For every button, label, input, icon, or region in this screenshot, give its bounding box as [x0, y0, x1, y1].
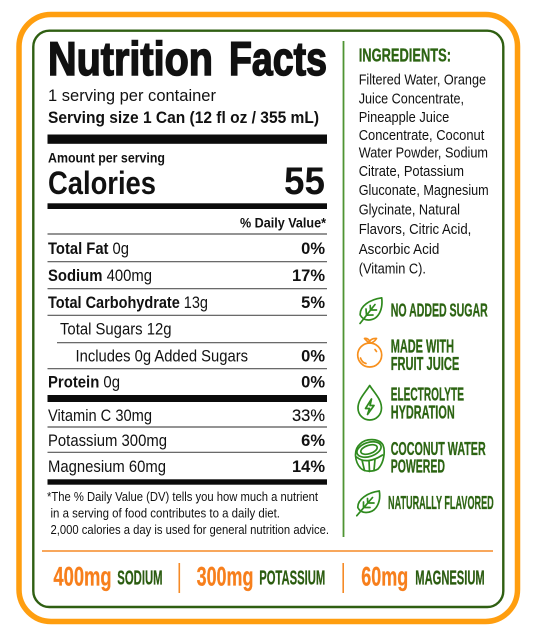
row: total carbohydrate [48, 293, 325, 312]
row: added sugars: Includes 0g Added Sugars [76, 347, 248, 366]
row: potassium: Potassium 300mg [48, 431, 167, 450]
ingredients list: (Vitamin C). [359, 260, 426, 277]
title: Facts [229, 32, 327, 85]
panel: nutrition facts [47, 32, 329, 537]
stat: potassium [197, 562, 325, 592]
row: magnesium [48, 457, 325, 476]
row: vitamin c: Vitamin C 30mg [48, 406, 152, 425]
stat: magnesium: 60mg [361, 562, 408, 592]
row: potassium: 6% [301, 432, 325, 450]
row: added sugars: 0% [301, 348, 325, 366]
badge: no added sugar [360, 298, 488, 324]
stat: magnesium [361, 562, 485, 592]
badge: electrolyte hydration [358, 385, 464, 422]
row: total carbohydrate: Total Carbohydrate 13g [48, 293, 208, 312]
footnote: in a serving of food contributes to a daily diet. [50, 506, 280, 521]
footnote [47, 489, 329, 537]
ingredients list: Citrate, Potassium [359, 163, 464, 180]
ingredients list: Filtered Water, Orange [359, 71, 486, 88]
row: total carbohydrate: 5% [301, 294, 325, 312]
label: coconut water powered: POWERED [391, 456, 445, 476]
icon: coconut [355, 439, 384, 472]
badge: naturally flavored [357, 491, 494, 516]
row: total fat [48, 239, 325, 258]
calories value: 55 [284, 160, 325, 203]
badge: coconut water powered [355, 439, 486, 476]
amount per serving: Amount per serving [48, 150, 165, 166]
row: total fat: Total Fat 0g [48, 239, 129, 258]
title: Nutrition [48, 32, 213, 85]
ingredients list: Concentrate, Coconut [359, 127, 485, 144]
icon: leaf [360, 298, 382, 324]
label: coconut water powered [391, 439, 486, 476]
panel: ingredients [359, 46, 489, 277]
row: total fat: 0% [301, 240, 325, 258]
calories label: Calories [48, 165, 156, 201]
ingredients list: Water Powder, Sodium [359, 145, 488, 162]
row: sodium: Sodium 400mg [48, 266, 152, 285]
row: sodium [48, 266, 325, 285]
badge: made with fruit juice [358, 336, 459, 374]
icon: drop with bolt [358, 386, 382, 420]
label: electrolyte hydration: ELECTROLYTE [391, 385, 464, 405]
stat: sodium: SODIUM [117, 568, 163, 590]
label: electrolyte hydration [391, 385, 464, 422]
row: magnesium: Magnesium 60mg [48, 457, 166, 476]
servings per container: 1 serving per container [48, 86, 216, 105]
ingredients list: Glycinate, Natural [359, 201, 460, 218]
ingredients list [359, 71, 489, 277]
ingredients list: Juice Concentrate, [359, 91, 464, 108]
stat: sodium: 400mg [53, 562, 112, 592]
label: made with fruit juice: FRUIT JUICE [391, 354, 459, 374]
daily value header: % Daily Value* [240, 214, 326, 230]
row: total sugars: Total Sugars 12g [60, 320, 172, 339]
label: made with fruit juice: MADE WITH [391, 336, 454, 356]
row: protein [48, 372, 325, 391]
row: vitamin c: 33% [292, 407, 325, 425]
stat: potassium: 300mg [197, 562, 253, 592]
serving size: Serving size 1 Can (12 fl oz / 355 mL) [48, 108, 319, 127]
row: potassium [48, 431, 325, 450]
row: magnesium: 14% [292, 458, 325, 476]
ingredients list: Gluconate, Magnesium [359, 182, 489, 199]
row: protein: 0% [301, 373, 325, 391]
stat: potassium: POTASSIUM [259, 568, 325, 590]
ingredients heading: INGREDIENTS: [359, 46, 451, 66]
label: made with fruit juice [391, 336, 459, 374]
ingredients list: Flavors, Citric Acid, [359, 221, 471, 238]
ingredients list: Ascorbic Acid [359, 241, 439, 258]
row: protein: Protein 0g [48, 372, 120, 391]
footnote: *The % Daily Value (DV) tells you how much a nutrient [47, 489, 318, 504]
row: sodium: 17% [292, 267, 325, 285]
row: vitamin c [48, 406, 325, 425]
icon: leaf [357, 491, 380, 516]
stat strip [53, 562, 485, 593]
icon: orange [358, 338, 382, 367]
label: electrolyte hydration: HYDRATION [391, 402, 455, 422]
ingredients list: Pineapple Juice [359, 109, 449, 126]
footnote: 2,000 calories a day is used for general nutrition advice. [50, 522, 329, 537]
